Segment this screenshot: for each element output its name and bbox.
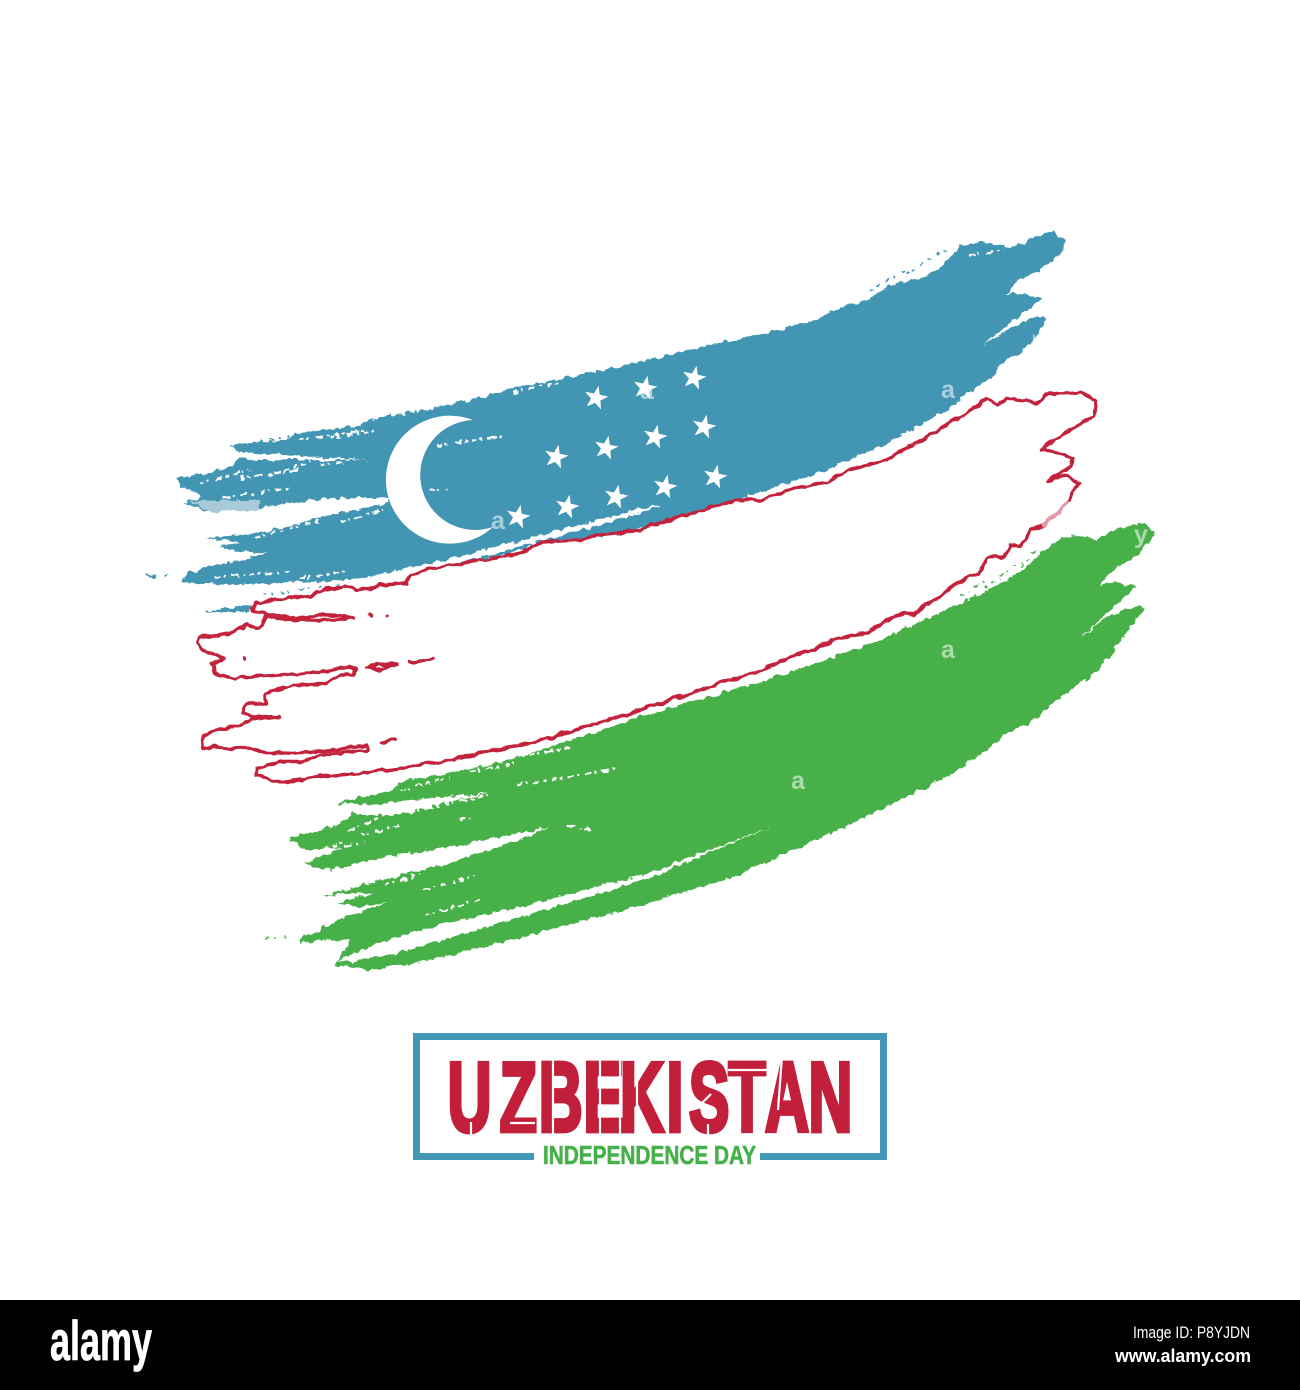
flag illustration [145,233,1155,970]
twelve stars [504,363,729,529]
stencil gaps [471,1056,838,1136]
green brush stroke [265,523,1155,970]
badge frame [416,1036,884,1156]
watermark letters [491,376,1148,795]
watermark letters: a [640,377,655,405]
watermark letters: y [1134,521,1148,549]
footer bar [0,1300,1300,1390]
website: www.alamy.com [1114,1346,1251,1366]
watermark letters: a [791,767,806,795]
heading: UZBEKISTAN: UZBEKISTAN [448,1043,852,1153]
footer logo: alamy [50,1309,152,1372]
title badge [416,1036,884,1170]
watermark letters: a [491,507,506,535]
crescent [386,416,493,544]
watermark letters: a [941,636,956,664]
image id: Image ID: P8YJDN [1133,1323,1250,1342]
watermark letters: a [941,376,956,404]
red outline of white stroke [197,392,1095,782]
subheading: INDEPENDENCE DAY: INDEPENDENCE DAY [543,1140,756,1170]
blue brush stroke [145,233,1065,612]
